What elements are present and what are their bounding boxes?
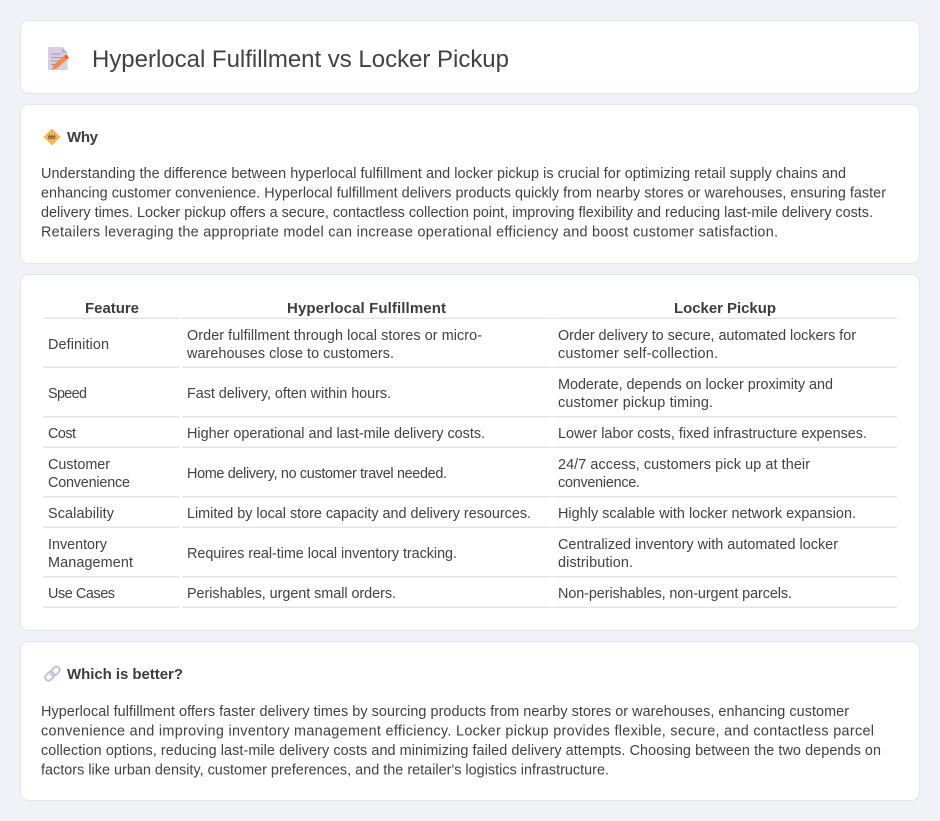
icon: link [44, 665, 61, 682]
row: customer convenience: Home delivery, no customer travel needed. [187, 466, 447, 482]
row: definition: Order delivery to secure, automated lockers for [558, 328, 856, 344]
row: inventory management [48, 537, 838, 571]
heading: which is better: Which is better? [67, 666, 183, 683]
text block: which is better: Hyperlocal fulfillment offers faster delivery times by sourcing products from nearby stores or warehouses, enhancing customer [41, 704, 849, 720]
text block: why: Understanding the difference between hyperlocal fulfillment and locker pickup is crucial for optimizing retail supply chains and [41, 166, 846, 182]
row: use cases: Use Cases [48, 586, 115, 602]
row: cost: Higher operational and last-mile delivery costs. [187, 426, 485, 442]
row: definition: Definition [48, 337, 109, 353]
row: customer convenience [48, 457, 810, 491]
row: customer convenience: Customer [48, 457, 110, 473]
row: scalability [48, 506, 856, 522]
row: speed: Moderate, depends on locker proximity and [558, 377, 833, 393]
table header: Locker Pickup [674, 300, 776, 317]
text block: why [41, 166, 886, 240]
row: definition [48, 328, 856, 362]
row: customer convenience: Convenience [48, 475, 130, 491]
panel: why [20, 104, 920, 264]
icon: document with pencil [48, 47, 69, 70]
row: speed [48, 377, 833, 411]
icon: warning diamond [44, 128, 60, 146]
panel: title [20, 20, 920, 94]
row: use cases [48, 586, 792, 602]
text block: why: enhancing customer convenience. Hyperlocal fulfillment delivers products quickly from nearby stores or warehouses, ensuring faster [41, 186, 886, 202]
row: inventory management: distribution. [558, 555, 633, 571]
row: cost: Cost [48, 426, 76, 442]
row: scalability: Limited by local store capacity and delivery resources. [187, 506, 531, 522]
heading: why: Why [67, 129, 99, 146]
table header: Hyperlocal Fulfillment [287, 300, 446, 317]
panel: comparison table [20, 274, 920, 630]
text block: which is better: collection options, reducing last-mile delivery costs and minimizing failed delivery attempts. Choosing between the two depends on [41, 743, 881, 759]
table header: Feature [85, 300, 139, 317]
text block: which is better [41, 704, 881, 778]
row: scalability: Scalability [48, 506, 115, 522]
row: cost: Lower labor costs, fixed infrastructure expenses. [558, 426, 867, 442]
row: definition: customer self-collection. [558, 346, 718, 362]
row: customer convenience: convenience. [558, 475, 640, 491]
row: use cases: Perishables, urgent small orders. [187, 586, 396, 602]
panel: which is better [20, 642, 920, 800]
text block: which is better: factors like urban density, customer preferences, and the retailer's logistics infrastructure. [41, 762, 609, 778]
row: speed: Speed [48, 386, 87, 402]
row: inventory management: Management [48, 555, 133, 571]
text block: which is better: convenience and improving inventory management efficiency. Locker pickup provides flexible, secure, and contactless parcel [41, 724, 874, 740]
row: use cases: Non-perishables, non-urgent parcels. [558, 586, 792, 602]
table header [85, 300, 776, 317]
row: speed: customer pickup timing. [558, 395, 713, 411]
row: inventory management: Requires real-time local inventory tracking. [187, 546, 457, 562]
row: definition: Order fulfillment through local stores or micro- [187, 328, 482, 344]
text block: why: delivery times. Locker pickup offers a secure, contactless collection point, improving flexibility and reducing last-mile delivery costs. [41, 205, 873, 221]
text block: why: Retailers leveraging the appropriate model can increase operational efficiency and boost customer satisfaction. [41, 224, 778, 240]
row: customer convenience: 24/7 access, customers pick up at their [558, 457, 810, 473]
row: speed: Fast delivery, often within hours. [187, 386, 391, 402]
row: cost [48, 426, 867, 442]
row: scalability: Highly scalable with locker network expansion. [558, 506, 856, 522]
row: inventory management: Centralized inventory with automated locker [558, 537, 838, 553]
heading: title: Hyperlocal Fulfillment vs Locker Pickup [92, 46, 509, 73]
row: definition: warehouses close to customers. [186, 346, 394, 362]
row: inventory management: Inventory [48, 537, 108, 553]
